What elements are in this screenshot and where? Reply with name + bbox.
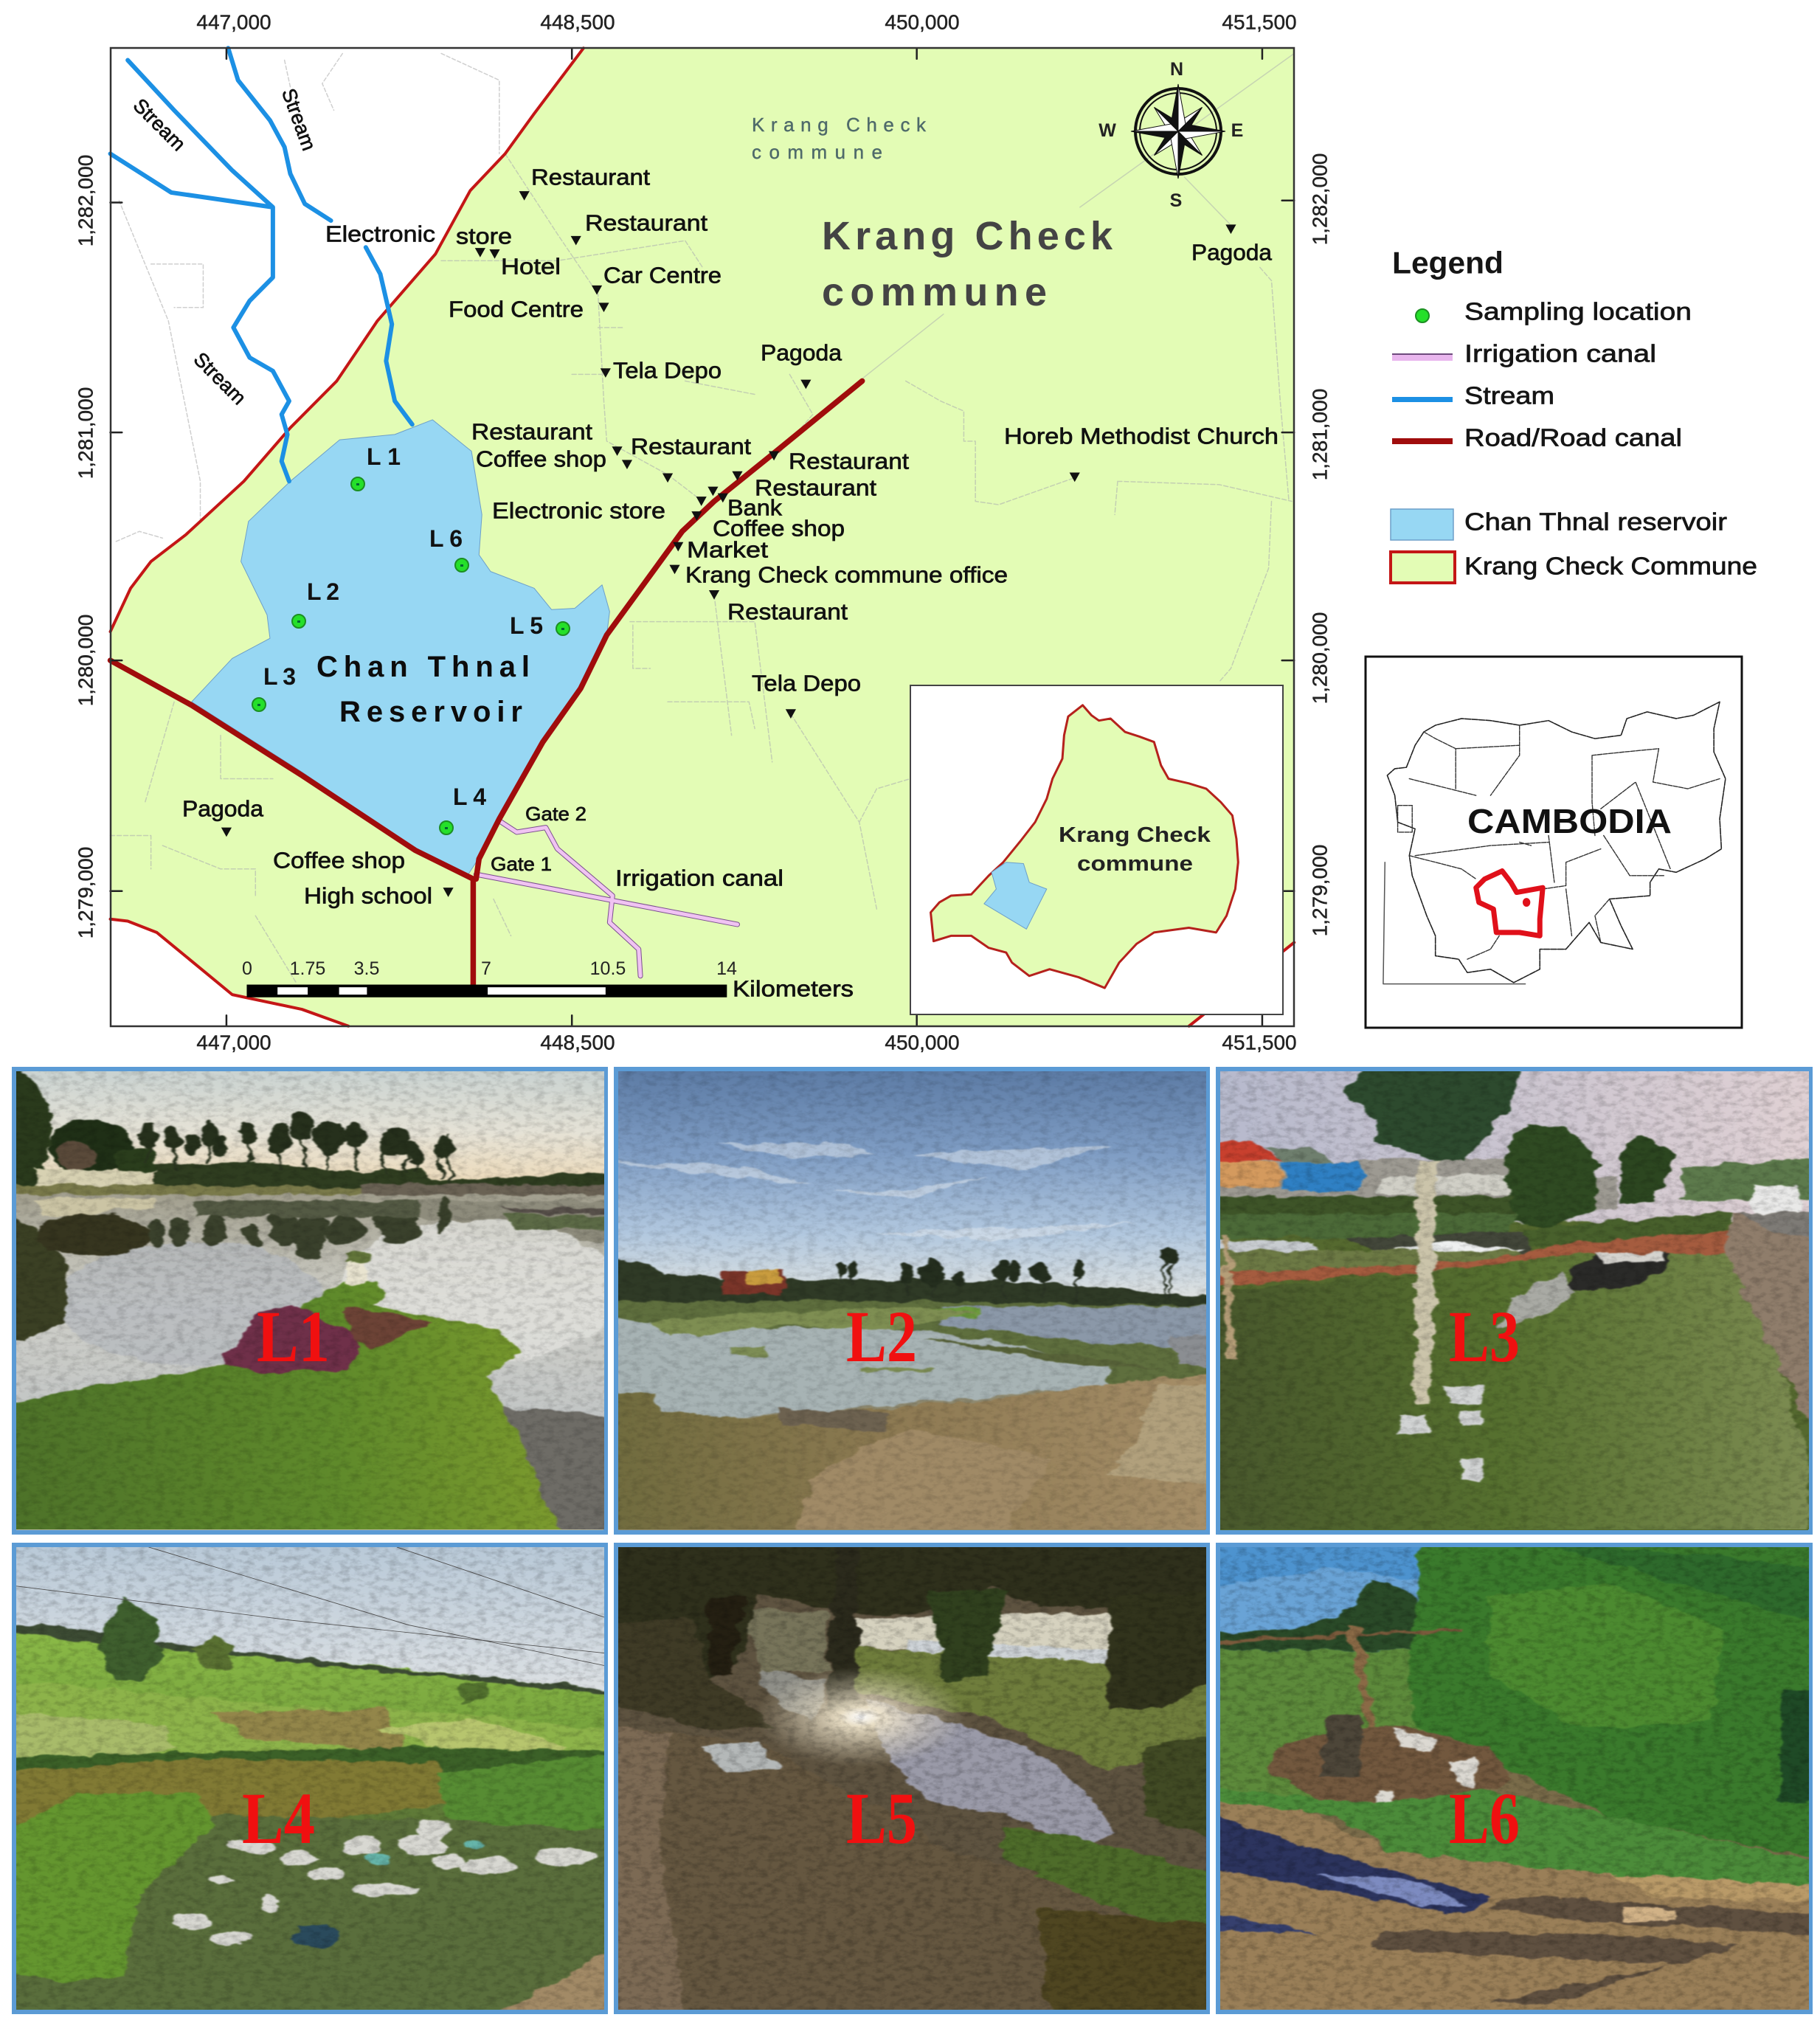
commune name small [752, 114, 927, 163]
panel: Cambodia locator map [1366, 657, 1742, 1028]
panel: legend [1391, 245, 1757, 583]
label: Restaurant: Restaurant [585, 210, 707, 236]
Reservoir: Reservoir [339, 696, 522, 728]
locator frame [1366, 657, 1742, 1028]
selected province [1476, 871, 1543, 936]
label: Tela Depo: Tela Depo [613, 357, 722, 384]
label: Coffee shop: Coffee shop [273, 847, 405, 874]
legend symbol: stream [1392, 397, 1453, 402]
map place labels [182, 164, 1279, 1002]
label: Coffee shop: Coffee shop [713, 515, 845, 542]
province borders [1398, 725, 1720, 959]
label: Restaurant: Restaurant [755, 475, 876, 500]
label: Horeb Methodist Church: Horeb Methodist Church [1004, 423, 1279, 449]
legend text: stream: Stream [1464, 382, 1554, 409]
L4 photo scene [16, 1547, 604, 2010]
scale 0: 0 [242, 958, 252, 979]
scale 7: 7 [481, 958, 491, 979]
label: Food Centre: Food Centre [449, 297, 584, 322]
448,500 top: 448,500 [540, 10, 615, 34]
point of interest markers [221, 191, 1236, 897]
scale bar [246, 985, 727, 997]
commune: commune [822, 270, 1047, 314]
label: Coffee shop: Coffee shop [476, 446, 606, 472]
447,000 bottom: 447,000 [196, 1031, 271, 1054]
stream label 3: Stream [190, 348, 250, 409]
sampling point L1 [351, 477, 364, 491]
irrigation canals inner [476, 821, 737, 976]
legend title: Legend [1392, 245, 1504, 280]
sampling point L3 [252, 698, 266, 711]
map frame [111, 48, 1294, 1026]
1,279,000 right: 1,279,000 [1309, 845, 1331, 936]
diagonal minor roads near compass [859, 53, 1294, 381]
sampling point L2 [292, 615, 305, 628]
N: N [1170, 59, 1183, 80]
stream label 2: Stream [277, 86, 320, 153]
448,500 bottom: 448,500 [540, 1031, 615, 1054]
sampling point centres [257, 483, 564, 829]
legend symbol: irrigation canal [1392, 353, 1453, 361]
label: Electronic: Electronic [325, 221, 435, 246]
sampling point L4 [440, 821, 453, 834]
L1 photo label: L1 [257, 1296, 330, 1377]
sampling location labels [263, 443, 543, 810]
roads and road canals [111, 381, 862, 986]
W: W [1098, 120, 1116, 141]
label: Irrigation canal: Irrigation canal [615, 865, 783, 891]
panel: photo L1 [0, 1055, 642, 1552]
panel: photo L3 [1187, 1055, 1820, 1552]
label: Tela Depo: Tela Depo [752, 670, 861, 696]
commune boundary [111, 48, 1294, 1026]
sampling point L5 [556, 622, 570, 635]
L1 frame [14, 1069, 606, 1532]
L3 frame [1218, 1069, 1810, 1532]
streams [111, 48, 412, 481]
L1 photo scene [16, 1071, 604, 1529]
L2 frame [616, 1069, 1208, 1532]
label: L2: L 2 [307, 578, 339, 605]
minor roads inside commune [111, 153, 1292, 983]
legend symbol: sampling location [1416, 309, 1429, 322]
commune: commune [1077, 852, 1193, 876]
Krang Check: Krang Check [1059, 823, 1211, 847]
scale bar numbers [242, 958, 737, 979]
label: Restaurant: Restaurant [531, 164, 650, 190]
label: L6: L 6 [429, 525, 463, 552]
label: CAMBODIA: CAMBODIA [1467, 802, 1672, 840]
legend text: reservoir: Chan Thnal reservoir [1464, 508, 1727, 536]
label: L4: L 4 [453, 784, 486, 810]
1,279,000 left: 1,279,000 [74, 847, 97, 938]
panel: photo L5 [584, 1529, 1243, 2023]
inset commune outline [931, 705, 1238, 988]
L4 frame [14, 1545, 606, 2012]
label: L5: L 5 [510, 612, 543, 639]
L6 photo label: L6 [1449, 1777, 1520, 1859]
label: Hotel: Hotel [501, 254, 561, 279]
label: Restaurant: Restaurant [471, 419, 592, 444]
label: Restaurant: Restaurant [727, 599, 848, 624]
450,000 bottom: 450,000 [885, 1031, 960, 1054]
commune small: commune [752, 141, 882, 163]
1,280,000 left: 1,280,000 [74, 615, 97, 706]
legend symbol: reservoir [1391, 509, 1453, 540]
L3 photo label: L3 [1449, 1296, 1520, 1377]
451,500 bottom: 451,500 [1222, 1031, 1297, 1054]
L2 photo scene [618, 1071, 1206, 1529]
commune location dot [1523, 899, 1530, 907]
stream label 1: Stream [129, 94, 190, 155]
irrigation canals [476, 821, 737, 976]
sampling location markers [252, 477, 570, 834]
panel: photo L4 [0, 1529, 642, 2023]
icon: north arrow compass [1131, 84, 1225, 179]
compass letters [1098, 59, 1243, 211]
1,282,000 left: 1,282,000 [74, 155, 97, 246]
Krang Check commune land [111, 48, 1294, 1026]
S: S [1170, 190, 1182, 211]
sampling point L6 [455, 559, 468, 572]
country outline [1387, 702, 1726, 983]
panel: main map [74, 10, 1331, 1054]
inset commune and reservoir shapes [931, 705, 1238, 988]
Cambodia provinces [1383, 702, 1726, 984]
L5 photo scene [618, 1547, 1206, 2010]
label: Gate 2: Gate 2 [525, 803, 587, 825]
scale 1.75: 1.75 [290, 958, 325, 979]
1,282,000 right: 1,282,000 [1309, 153, 1331, 245]
panel: photo L2 [584, 1055, 1243, 1552]
legend text: road: Road/Road canal [1464, 423, 1682, 452]
legend text: irrigation canal: Irrigation canal [1464, 339, 1656, 367]
label: Restaurant: Restaurant [789, 449, 909, 474]
panel: photo L6 [1187, 1529, 1820, 2023]
inset reservoir [984, 862, 1047, 929]
1,280,000 right: 1,280,000 [1309, 612, 1331, 704]
label: Krang Check commune office: Krang Check commune office [685, 562, 1008, 587]
L2 photo label: L2 [846, 1296, 917, 1377]
legend symbol: road [1392, 438, 1453, 444]
451,500 top: 451,500 [1222, 10, 1297, 34]
label: Bank: Bank [727, 494, 783, 521]
label: Gate 1: Gate 1 [491, 853, 552, 875]
label: store: store [456, 223, 512, 249]
447,000 top: 447,000 [196, 10, 271, 34]
stream labels [129, 86, 320, 409]
L5 frame [616, 1545, 1208, 2012]
Krang Check: Krang Check [822, 214, 1113, 258]
map white background [111, 48, 1294, 1026]
L5 photo label: L5 [846, 1777, 917, 1859]
reservoir name [316, 651, 530, 728]
label: Market: Market [687, 537, 768, 562]
L3 photo scene [1220, 1071, 1809, 1529]
minor roads outside commune [116, 53, 499, 695]
label: Car Centre: Car Centre [603, 263, 722, 288]
450,000 top: 450,000 [885, 10, 960, 34]
L6 photo scene [1220, 1547, 1809, 2010]
coast line mark [1383, 862, 1526, 984]
legend text: commune: Krang Check Commune [1464, 552, 1757, 580]
label: Kilometers: Kilometers [733, 975, 854, 1002]
1,281,000 left: 1,281,000 [74, 387, 97, 479]
legend symbol: commune [1391, 552, 1455, 583]
map artwork: land, reservoir, roads, streams [111, 48, 1294, 1026]
label: Pagoda: Pagoda [761, 339, 842, 366]
label: Restaurant: Restaurant [631, 434, 751, 459]
scale 3.5: 3.5 [354, 958, 379, 979]
Chan Thnal: Chan Thnal [316, 651, 530, 683]
L6 frame [1218, 1545, 1810, 2012]
panel: commune inset map [910, 685, 1283, 1014]
legend text: sampling location: Sampling location [1464, 298, 1692, 325]
axis labels [74, 10, 1331, 1054]
label: Electronic store: Electronic store [492, 497, 665, 524]
map axis ticks [111, 48, 1294, 1026]
1,281,000 right: 1,281,000 [1309, 389, 1331, 480]
commune name large [822, 214, 1113, 314]
E: E [1231, 120, 1243, 141]
label: Pagoda: Pagoda [182, 795, 264, 822]
label: Pagoda: Pagoda [1191, 239, 1273, 266]
inset label [1059, 823, 1211, 876]
label: L3: L 3 [263, 663, 296, 690]
label: L1: L 1 [367, 443, 401, 470]
Krang Check small: Krang Check [752, 114, 927, 136]
inset frame [910, 685, 1283, 1014]
label: High school: High school [304, 882, 432, 909]
scale 14: 14 [716, 958, 737, 979]
Chan Thnal reservoir [192, 420, 609, 876]
scale 10.5: 10.5 [590, 958, 626, 979]
L4 photo label: L4 [242, 1777, 315, 1859]
